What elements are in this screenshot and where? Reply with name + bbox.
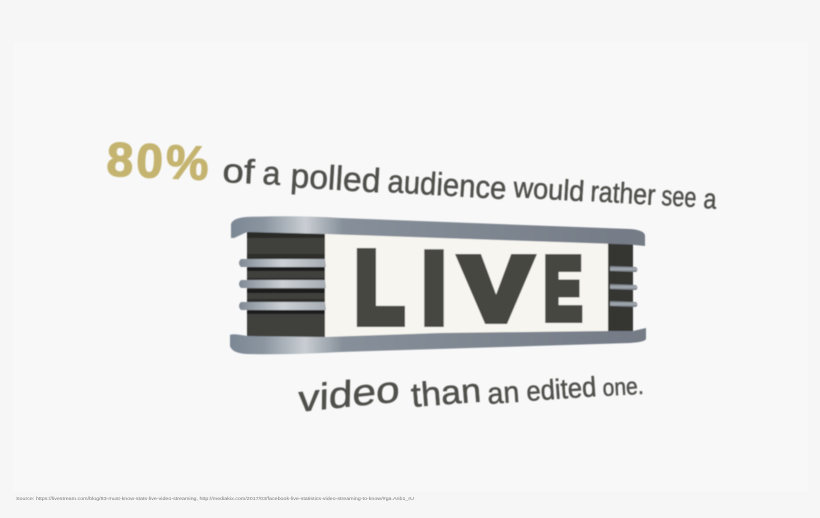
LIVE lettering: I (423, 233, 445, 343)
LIVE lettering: L (356, 232, 404, 344)
closing line: than (410, 372, 482, 415)
LIVE lettering: V (461, 240, 531, 340)
headline: top line (106, 134, 718, 215)
headline words: a (262, 154, 282, 192)
LIVE lettering: E (544, 239, 582, 338)
closing line: one. (602, 373, 644, 402)
right metal strips (610, 266, 638, 307)
closing line: an (486, 376, 520, 411)
headline words: rather (590, 176, 657, 212)
headline words: see (661, 180, 697, 213)
LIVE lettering (356, 232, 582, 344)
headline words: audience (387, 163, 508, 206)
headline words (222, 152, 718, 215)
headline words: of (222, 152, 256, 192)
top metal bar (231, 216, 645, 246)
source note: Source: https://livestream.com/blog/83-must-know-stats-live-video-streaming, http://mediakix.com/2017/03/facebook-live-statistics-video-streaming-to-know/#ga.Anb1_rU (16, 496, 414, 501)
headline words: would (512, 172, 585, 208)
left metal strips (239, 259, 326, 310)
stat: 80%: 80% (106, 134, 210, 191)
headline words: a (703, 183, 718, 215)
closing line: video (298, 367, 400, 420)
right dark block (608, 243, 633, 331)
center light panel (325, 234, 608, 337)
closing line: edited (525, 371, 597, 407)
closing line (298, 367, 644, 420)
bottom metal bar (230, 328, 646, 354)
headline words: polled (290, 157, 382, 200)
left dark block (247, 232, 325, 337)
LIVE marquee sign (230, 216, 646, 354)
